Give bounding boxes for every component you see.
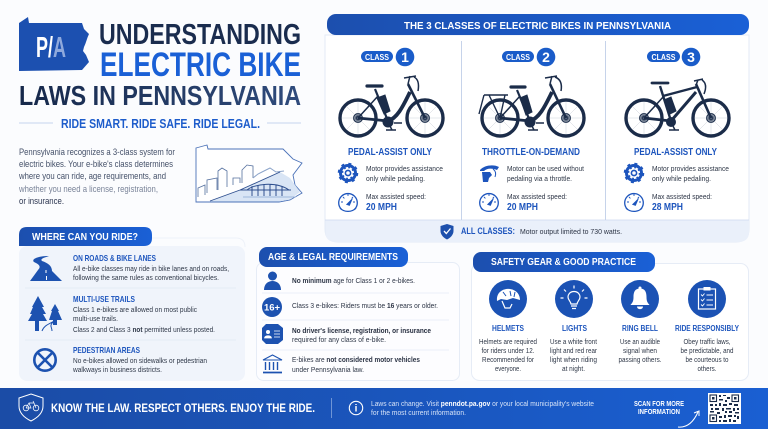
item: ring bell: [618, 280, 662, 364]
text: helmets: HELMETS: [492, 323, 524, 333]
section heading: classes: [327, 14, 749, 35]
title: [19, 19, 301, 111]
section heading: where: [19, 227, 152, 246]
section heading: where: WHERE CAN YOU RIDE?: [32, 231, 138, 243]
icon: no pedestrians: [34, 349, 56, 371]
icon: information: i: [355, 404, 358, 414]
icon: bell: [621, 280, 659, 318]
title: UNDERSTANDING: [99, 19, 301, 51]
title: ELECTRIC BIKE: [100, 46, 301, 84]
text: no licence needed: required for any class of e-bike.: [292, 335, 386, 344]
icon: bike shield: [19, 394, 43, 421]
text: roads and bike lanes: [73, 253, 229, 282]
panel: age and legal requirements: [256, 247, 460, 380]
class 1 column: [339, 48, 443, 213]
illustration: step-through e-bike: [340, 76, 443, 136]
text: motor description: [366, 164, 443, 183]
illustration: Pennsylvania skyline and bridge: [196, 145, 302, 202]
illustration: speed pedelec: [626, 79, 729, 136]
badge: class 1: CLASS: [365, 53, 389, 62]
text: lights: LIGHTS: [562, 323, 587, 333]
text: max speed: [366, 192, 426, 213]
badge: class 1: 1: [401, 49, 409, 65]
text: motor description: [652, 164, 729, 183]
panel: where can you ride: [19, 227, 245, 381]
text: pedestrian areas: [72, 345, 207, 374]
icon: trees and trail: [28, 296, 62, 331]
text: max speed: 28 MPH: [652, 202, 683, 213]
text: max speed: 20 MPH: [507, 202, 538, 213]
intro paragraph: or insurance.: [19, 196, 64, 206]
text: max speed: [652, 192, 712, 213]
class 3 column: [625, 48, 729, 213]
text: lights: Use a white front: [550, 337, 598, 346]
text: no licence needed: No driver's license, registration, or insurance: [292, 326, 431, 335]
footer band: [0, 388, 768, 429]
icon: light bulb: [555, 280, 593, 318]
text: lights: light and red rear: [550, 346, 597, 355]
disclaimer text: [371, 399, 594, 417]
text: max speed: Max assisted speed:: [507, 192, 567, 201]
text: throttle description: [507, 164, 585, 183]
text: motor description: only while pedaling.: [366, 174, 425, 183]
section heading: classes: THE 3 CLASSES OF ELECTRIC BIKES IN PENNSYLVANIA: [404, 20, 671, 32]
text: ride responsibly: others.: [698, 364, 716, 373]
text: pedestrian areas: walkways in business districts.: [72, 365, 162, 374]
icon: person: [264, 272, 281, 290]
icon: motor gear: [626, 166, 642, 180]
title: LAWS IN PENNSYLVANIA: [19, 80, 301, 111]
icon: motor gear: [340, 166, 356, 180]
section heading: safety: SAFETY GEAR & GOOD PRACTICE: [491, 256, 636, 268]
icon: winding road: [30, 256, 62, 281]
text: class 3 age: Class 3 e-bikes: Riders must be 16 years or older.: [292, 301, 438, 310]
text: ring bell: [618, 323, 662, 364]
arrow: to QR code: [678, 411, 699, 427]
section heading: safety: [473, 252, 655, 272]
text: max speed: Max assisted speed:: [652, 192, 712, 201]
intro paragraph: [18, 147, 175, 206]
badge: class 1: [361, 48, 414, 66]
badge: class 3: CLASS: [652, 53, 676, 62]
tagline: RIDE SMART. RIDE SAFE. RIDE LEGAL.: [61, 116, 260, 131]
intro paragraph: where you can ride, age requirements, and: [18, 171, 166, 181]
text: lights: at night.: [562, 364, 585, 373]
panel: the 3 classes: [325, 14, 749, 242]
text: motor description: Motor provides assistance: [366, 164, 443, 173]
badge: class 2: [502, 48, 555, 66]
icon: 16 plus: 16+: [264, 302, 281, 314]
item: helmets: [479, 280, 537, 373]
text: ring bell: RING BELL: [622, 323, 658, 333]
heading: throttle-on-demand: THROTTLE-ON-DEMAND: [482, 147, 580, 158]
text: roads and bike lanes: ON ROADS & BIKE LANES: [73, 253, 156, 263]
disclaimer text: for the most current information.: [371, 408, 466, 417]
text: max speed: [507, 192, 567, 213]
callout: all classes: ALL CLASSES:: [461, 226, 515, 237]
text: helmets: for riders under 12.: [482, 346, 534, 355]
text: ring bell: Use an audible: [620, 337, 660, 346]
text: throttle description: Motor can be used without: [507, 164, 585, 173]
text: not motor vehicles: [292, 355, 420, 374]
class 2 column: [479, 48, 585, 213]
icon: checklist clipboard: [688, 280, 726, 318]
icon: government building: [263, 355, 282, 372]
text: lights: [550, 323, 598, 373]
text: not motor vehicles: under Pennsylvania law.: [292, 365, 364, 374]
icon: helmet: [489, 280, 527, 318]
text: ring bell: signal when: [623, 346, 657, 355]
icon: speedometer: [480, 194, 498, 211]
text: ride responsibly: be predictable, and: [680, 346, 734, 355]
illustration: e-bike with rear rack: [479, 76, 584, 136]
icon: speedometer: [339, 194, 357, 211]
text: helmets: everyone.: [495, 364, 521, 373]
section heading: age and legal: [259, 247, 408, 267]
text: helmets: [479, 323, 537, 373]
panel: safety gear: [472, 252, 748, 380]
item: lights: [550, 280, 598, 373]
icon: Pennsylvania state badge: P/A: [36, 32, 66, 64]
text: ride responsibly: Obey traffic laws,: [684, 337, 730, 346]
QR code: [708, 393, 741, 424]
scan prompt: SCAN FOR MORE: [634, 399, 684, 408]
disclaimer text: Laws can change. Visit penndot.pa.gov or your local municipality's website: [371, 399, 594, 408]
text: pedestrian areas: No e-bikes allowed on sidewalks or pedestrian: [73, 356, 207, 365]
header block: [18, 17, 302, 206]
text: roads and bike lanes: following the same rules as conventional bicycles.: [73, 273, 219, 282]
text: multi-use trails: Class 2 and Class 3 not permitted unless posted.: [73, 325, 215, 334]
icon: information: [349, 401, 363, 415]
text: ring bell: passing others.: [618, 355, 662, 364]
slogan: KNOW THE LAW. RESPECT OTHERS. ENJOY THE RIDE.: [51, 403, 315, 415]
icon: throttle: [480, 165, 499, 182]
section heading: age and legal: AGE & LEGAL REQUIREMENTS: [268, 251, 398, 263]
icon: 16 plus: [262, 297, 282, 317]
text: multi-use trails: MULTI-USE TRAILS: [73, 294, 135, 304]
text: throttle description: pedaling via a throttle.: [507, 174, 572, 183]
badge: class 2: CLASS: [506, 53, 530, 62]
text: multi-use trails: [73, 294, 215, 334]
icon: speedometer: [625, 194, 643, 211]
scan prompt: INFORMATION: [638, 407, 680, 416]
intro paragraph: electric bikes. Your e-bike's class determines: [19, 159, 173, 169]
text: ride responsibly: RIDE RESPONSIBLY: [675, 323, 739, 333]
heading: pedal-assist only: PEDAL-ASSIST ONLY: [348, 147, 432, 158]
text: motor description: only while pedaling.: [652, 174, 711, 183]
text: helmets: Recommended for: [482, 355, 534, 364]
icon: Pennsylvania state badge: [19, 17, 89, 71]
text: pedestrian areas: PEDESTRIAN AREAS: [73, 345, 140, 355]
text: helmets: Helmets are required: [479, 337, 537, 346]
text: roads and bike lanes: All e-bike classes may ride in bike lanes and on roads,: [73, 264, 229, 273]
text: motor description: Motor provides assistance: [652, 164, 729, 173]
text: ride responsibly: [675, 323, 739, 373]
intro paragraph: whether you need a license, registration,: [18, 184, 158, 194]
text: not motor vehicles: E-bikes are not considered motor vehicles: [292, 355, 420, 364]
text: max speed: Max assisted speed:: [366, 192, 426, 201]
text: no minimum age: No minimum age for Class 1 or 2 e-bikes.: [292, 276, 415, 285]
text: ride responsibly: be courteous to: [686, 355, 728, 364]
callout: all classes: [440, 224, 622, 240]
text: multi-use trails: multi-use trails.: [73, 314, 118, 323]
callout: all classes: Motor output limited to 730 watts.: [520, 227, 622, 236]
item: ride responsibly: [675, 280, 739, 373]
badge: class 3: [647, 48, 700, 66]
intro paragraph: Pennsylvania recognizes a 3-class system for: [19, 147, 175, 157]
text: max speed: 20 MPH: [366, 202, 397, 213]
text: lights: light when riding: [550, 355, 597, 364]
text: multi-use trails: Class 1 e-bikes are allowed on most public: [73, 305, 197, 314]
heading: pedal-assist only: PEDAL-ASSIST ONLY: [634, 147, 717, 158]
badge: class 3: 3: [687, 49, 695, 65]
badge: class 2: 2: [542, 49, 550, 65]
scan prompt: [634, 399, 684, 416]
text: no licence needed: [292, 326, 431, 344]
icon: license card: [262, 324, 283, 344]
